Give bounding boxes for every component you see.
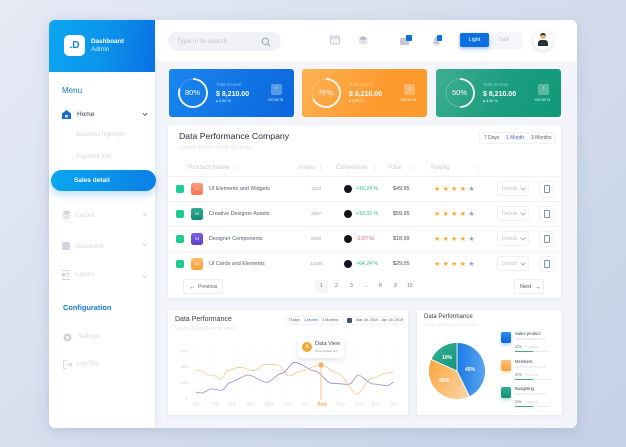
next button: Next <box>520 284 531 290</box>
stat card: blue <box>169 69 294 117</box>
y axis labels: 200 <box>180 380 189 385</box>
progress ring 76% <box>312 78 341 108</box>
table header: Product Name ↕ <box>188 164 236 171</box>
row 4 <box>168 251 561 276</box>
nav: log out <box>63 360 98 369</box>
details button: Details <box>502 261 517 267</box>
previous button: ← <box>189 284 196 291</box>
icon <box>501 387 511 398</box>
row 4: 12345 <box>310 261 323 266</box>
legend: sales product: Sales product <box>515 331 541 336</box>
stat card: green: ▴ 3,96 % <box>483 99 498 103</box>
row 2: +19,33 % <box>356 211 378 217</box>
menu heading: Menu <box>62 86 82 94</box>
details button <box>497 231 529 246</box>
chart range tabs: 7 Days <box>288 318 300 322</box>
legend: budgeting: Budgeting <box>515 386 534 391</box>
y axis labels: 600 <box>180 348 189 353</box>
star rating: ★★★★★ <box>434 186 477 193</box>
row 1: +16,24 % <box>356 186 378 192</box>
table header: Convertion ↕ <box>336 164 376 171</box>
row 3: Designer Components <box>209 236 263 242</box>
table header: Views ↕ <box>298 164 322 171</box>
row 3: -2,07 % <box>356 236 374 242</box>
search box <box>168 32 281 51</box>
legend: members: Sale description here <box>515 365 546 369</box>
icon: search <box>262 38 270 46</box>
stat card: green: +20,90 % <box>534 98 550 102</box>
tooltip: Data View <box>315 341 340 347</box>
month labels: Nov <box>372 402 381 408</box>
legend: budgeting: Sale description here <box>515 392 546 396</box>
sidebar header <box>49 20 155 72</box>
line chart plot <box>180 348 399 408</box>
tooltip: A <box>305 344 309 350</box>
checkbox <box>176 260 184 268</box>
pagination: 8 <box>379 283 382 289</box>
trend icon <box>344 185 352 193</box>
tooltip <box>298 338 344 358</box>
checkbox <box>176 235 184 243</box>
marker dot <box>318 362 324 368</box>
avatar <box>533 30 553 50</box>
stat card: blue: 80% <box>185 88 200 97</box>
row 4: +64,24 % <box>356 261 378 267</box>
chart title: Data Performance <box>175 316 232 323</box>
sidebar header: Admin <box>91 46 109 52</box>
pagination: 3 <box>350 283 353 289</box>
month labels: Dec <box>390 402 399 408</box>
y axis labels: 0 <box>185 396 188 401</box>
range tabs: 1 Month <box>506 135 524 141</box>
icon <box>501 332 511 343</box>
legend: members: Members <box>515 359 532 364</box>
stat card: blue: Total Income <box>216 82 242 86</box>
table header <box>188 164 480 171</box>
table header: ↕ <box>477 164 480 171</box>
nav: layout: Layout <box>76 213 94 219</box>
pagination <box>315 280 413 293</box>
row 2: Creative Designer Assets <box>209 211 270 217</box>
details button <box>497 181 529 196</box>
file icon <box>539 256 554 272</box>
icon: layers <box>358 36 368 44</box>
sidebar header: Dashboard <box>91 38 124 44</box>
details button <box>497 256 529 271</box>
pagination: 10 <box>407 283 413 289</box>
grid lines <box>197 342 394 398</box>
details button: Details <box>502 186 517 192</box>
legend: budgeting <box>499 386 549 407</box>
next button: → <box>534 284 541 291</box>
slice labels: 45% <box>465 367 476 373</box>
arrow button <box>404 84 415 95</box>
file icon <box>539 231 554 247</box>
row 2: $59,95 <box>393 211 410 217</box>
month labels: May <box>265 402 275 408</box>
month labels: Jun <box>283 402 292 408</box>
nav: business highlight: Business highlight <box>76 132 124 138</box>
stat card: green: $ 8,210.00 <box>483 90 516 98</box>
checkbox <box>176 185 184 193</box>
stat card: orange: +20,90 % <box>400 98 416 102</box>
nav: settings <box>64 334 100 342</box>
pie chart <box>428 343 486 400</box>
pagination: 2 <box>335 283 338 289</box>
legend: members: Financial <box>525 373 538 377</box>
legend: budgeting: 37% <box>515 400 522 404</box>
theme toggle <box>458 32 522 49</box>
chart range tabs: 1 Month <box>304 318 318 322</box>
legend: members: 37% <box>515 373 522 377</box>
slice labels: 45% <box>439 378 450 384</box>
range tabs: 7 Days <box>484 135 500 141</box>
slice labels <box>439 355 476 384</box>
slice: green <box>431 342 457 371</box>
stat card: orange: 76% <box>318 88 333 97</box>
stat card: blue: ▴ 3,96 % <box>216 99 231 103</box>
icon <box>501 360 511 371</box>
row 3 <box>168 226 561 251</box>
stat card: blue: $ 8,210.00 <box>216 90 249 98</box>
pie title: Data Performance <box>424 314 473 320</box>
stat card: blue: +20,90 % <box>267 98 283 102</box>
number badge <box>191 258 203 270</box>
arrow button: ↑ <box>408 86 411 92</box>
month labels: Feb <box>210 402 219 408</box>
details button: Details <box>502 211 517 217</box>
details button: Details <box>502 236 517 242</box>
stat card: green: 50% <box>452 88 467 97</box>
progress ring 50% <box>446 78 475 108</box>
chart range tabs: 3 Months <box>322 318 338 322</box>
nav: log out: Log Out <box>77 361 98 367</box>
icon: window <box>330 36 340 44</box>
month labels: Oct <box>354 402 363 408</box>
slice: blue <box>457 342 485 397</box>
row 4: UI Cards and Elements <box>209 261 265 267</box>
trend icon <box>344 235 352 243</box>
y axis labels: 400 <box>180 364 189 369</box>
stat card: green: Total Income <box>483 82 509 86</box>
stat card: green <box>436 69 561 117</box>
month labels: Jan <box>193 402 201 408</box>
month labels: Apr <box>247 402 255 408</box>
stat card: orange: $ 8,210.00 <box>349 90 382 98</box>
pagination: 1 <box>320 283 323 289</box>
row 1: UI Elements and Widgets <box>209 186 270 192</box>
progress ring 80% <box>178 78 208 108</box>
next button <box>514 279 544 294</box>
nav: layout 2: Layout <box>76 272 94 278</box>
legend: sales product: Sale description here <box>515 337 546 341</box>
table title: Data Performance Company <box>179 130 289 140</box>
nav: home: Home <box>77 110 94 118</box>
series: purple line <box>196 362 393 393</box>
stat card: orange: ▴ 3,96 % <box>349 99 364 103</box>
details button <box>497 206 529 221</box>
nav: sales detail active: Sales detail <box>74 177 110 184</box>
logo <box>64 35 85 56</box>
row 3: 8910 <box>311 236 321 241</box>
legend: budgeting: Financial <box>525 400 538 404</box>
row 1: 1234 <box>311 186 321 191</box>
nav: home <box>62 110 148 119</box>
icon: bell with badge <box>433 35 442 46</box>
table subtitle: Lorem ipsum dolor sit amet <box>179 145 251 151</box>
row 2 <box>168 201 561 226</box>
range tabs: 3 Months <box>531 135 552 141</box>
slice: orange <box>428 359 470 399</box>
file icon <box>539 206 554 222</box>
panel: pie chart <box>417 310 562 415</box>
month labels: Jul <box>301 402 308 408</box>
sidebar <box>49 20 155 428</box>
number badge <box>191 183 203 195</box>
number badge: 02 <box>195 211 199 216</box>
nav: document: Document <box>76 244 103 250</box>
logo: .D <box>70 40 80 51</box>
marker line <box>320 365 322 400</box>
tooltip: Put template text <box>315 349 338 353</box>
trend icon <box>344 260 352 268</box>
star rating: ★★★★★ <box>434 236 477 243</box>
top bar <box>155 20 577 61</box>
number badge <box>191 233 203 245</box>
trend icon <box>344 210 352 218</box>
toggle: light active <box>460 33 489 47</box>
arrow button <box>271 84 282 95</box>
icon: mail with badge <box>400 35 412 45</box>
table header: Total ↕ <box>388 164 412 171</box>
nav: layout <box>62 210 148 220</box>
chart subtitle: Lorem ipsum dolor sit amet <box>175 326 235 332</box>
date range picker <box>343 316 403 325</box>
checkbox <box>176 210 184 218</box>
pagination: 9 <box>394 283 397 289</box>
number badge <box>191 208 203 220</box>
legend: members <box>500 359 549 380</box>
month labels: Mar <box>228 402 237 408</box>
number badge: 03 <box>195 236 199 241</box>
row 1: $49,95 <box>393 186 410 192</box>
theme toggle: Dark <box>499 37 510 43</box>
pie subtitle: Lorem ipsum dolor sit amet <box>424 322 478 327</box>
stat card: orange: Total Income <box>349 82 375 86</box>
nav: document <box>62 242 148 250</box>
row 1 <box>168 176 561 201</box>
row 3: $18,99 <box>393 236 410 242</box>
month labels: Aug <box>317 402 327 408</box>
month labels: Sep <box>336 402 345 408</box>
y axis labels <box>180 348 189 401</box>
pagination: ... <box>364 283 368 289</box>
legend: sales product <box>499 331 549 352</box>
configuration heading: Configuration <box>63 302 111 312</box>
arrow button <box>538 84 549 95</box>
month labels <box>193 402 399 408</box>
panel: line chart <box>168 310 408 415</box>
number badge: 04 <box>195 261 199 266</box>
row 4: $29,05 <box>393 261 410 267</box>
nav: payment info: Payment Info <box>76 154 111 160</box>
nav: sales detail active <box>51 170 156 191</box>
arrow button: ↑ <box>275 86 278 92</box>
nav: settings: Settings <box>78 334 100 340</box>
row 2: 4567 <box>311 211 321 216</box>
series: orange line <box>196 364 393 394</box>
table header: Rating <box>431 164 450 171</box>
slice labels: 10% <box>442 355 453 361</box>
arrow button: ↑ <box>542 86 545 92</box>
range tabs <box>479 132 555 144</box>
star rating: ★★★★★ <box>434 261 477 268</box>
file icon <box>539 181 554 197</box>
dashboard window <box>49 20 577 428</box>
number badge: 01 <box>195 186 199 191</box>
stat card: orange <box>302 69 427 117</box>
previous button <box>183 279 223 294</box>
date range picker: Mar 26, 2019 - Apr 26, 2019 <box>356 318 403 322</box>
previous button: Previous <box>198 284 217 290</box>
chart range tabs <box>285 316 339 325</box>
search box: Type in to search ... <box>177 38 235 44</box>
nav: layout 2 <box>62 270 148 280</box>
star rating: ★★★★★ <box>434 211 477 218</box>
toggle: light active: Light <box>469 37 480 43</box>
legend: sales product: Financial <box>525 345 538 349</box>
panel: data performance table <box>168 125 561 298</box>
legend: sales product: 37% <box>515 345 522 349</box>
